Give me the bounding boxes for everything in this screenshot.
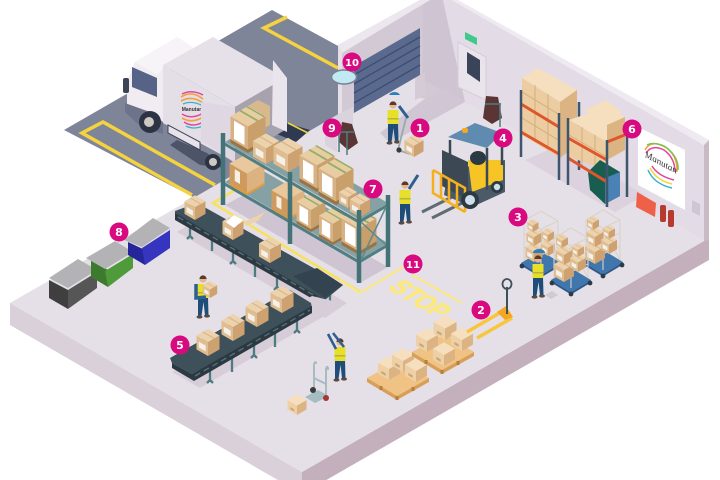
badge 4	[494, 128, 512, 148]
badge 6: 6	[628, 123, 636, 136]
badge 9	[322, 118, 342, 138]
badge 11: 11	[406, 260, 420, 271]
badge 9: 9	[328, 122, 336, 135]
badge 2	[472, 300, 490, 320]
badge 8	[110, 222, 128, 242]
pallet right	[412, 315, 474, 374]
exit sign	[465, 32, 477, 45]
asphalt loading yard	[64, 10, 340, 198]
yellow floor line	[213, 187, 360, 292]
stop text: STOP	[381, 276, 457, 322]
lower shelf boxes	[230, 153, 376, 255]
green bin	[86, 241, 133, 287]
mast	[442, 150, 468, 200]
badge 3	[508, 208, 528, 226]
rack B	[568, 100, 627, 207]
badge 1	[410, 118, 430, 138]
badge 4: 4	[499, 132, 507, 145]
open door right	[272, 60, 287, 132]
roll cages	[520, 210, 624, 296]
yellow bay marking lower	[82, 122, 215, 195]
badge 7: 7	[369, 183, 377, 196]
badge 6	[622, 120, 642, 138]
badge 2: 2	[477, 304, 485, 317]
worker at roll cages	[532, 249, 558, 299]
right wall	[443, 0, 709, 245]
upper shelf	[225, 125, 388, 220]
truck	[123, 37, 287, 170]
badge 7	[364, 180, 382, 198]
cab	[123, 37, 193, 134]
poster logo: Manutan	[644, 149, 677, 177]
trash bag near door	[483, 96, 502, 127]
main storage rack	[223, 106, 388, 283]
pallet truck	[467, 279, 513, 338]
open box with white contents	[222, 212, 265, 240]
upper shelf boxes	[230, 106, 370, 217]
yellow bay marking upper	[264, 17, 338, 68]
worker waving	[398, 175, 418, 225]
front wheel	[139, 111, 161, 133]
badge 8: 8	[115, 226, 123, 239]
poster	[638, 127, 685, 210]
forklift	[422, 123, 505, 218]
truck logo: Manutan	[182, 107, 202, 113]
lower shelf	[225, 165, 388, 260]
waste bins	[49, 218, 170, 309]
badge 1: 1	[416, 122, 424, 135]
dock door	[354, 28, 420, 113]
truck interior	[235, 78, 285, 160]
pallet left	[367, 348, 429, 400]
badge 5	[170, 336, 190, 354]
dock pillar with trash bag	[325, 107, 358, 155]
forklift roof cage	[450, 135, 502, 190]
rack uprights	[223, 133, 388, 283]
number badges	[110, 52, 642, 354]
upper conveyor	[175, 195, 347, 318]
badge 10	[342, 52, 362, 72]
worker with hand truck	[386, 92, 424, 157]
wall switch	[692, 200, 700, 216]
open door left	[201, 102, 235, 163]
black bin	[49, 259, 97, 309]
hand truck and box	[288, 362, 329, 415]
badge 11	[404, 254, 422, 274]
blue bin	[124, 218, 170, 265]
badge 5: 5	[176, 339, 184, 352]
back wall with dock door	[338, 0, 470, 118]
worker with raised arms	[328, 333, 347, 382]
dock mirror light	[332, 70, 356, 84]
dock gap	[272, 122, 310, 142]
cargo box	[163, 37, 287, 163]
badge 3: 3	[514, 211, 522, 224]
lower conveyor	[170, 286, 345, 388]
stop zone	[340, 267, 462, 322]
worker carrying box	[196, 275, 217, 319]
pallet racks	[521, 68, 645, 212]
badge 10: 10	[345, 58, 359, 69]
fire safety sign and extinguishers	[636, 192, 674, 227]
fork carriage	[433, 170, 465, 212]
rack A	[521, 68, 579, 180]
green and blue bins in rack	[588, 160, 620, 204]
open box	[184, 195, 206, 220]
door on right wall	[458, 32, 486, 100]
rear wheel	[205, 154, 221, 170]
